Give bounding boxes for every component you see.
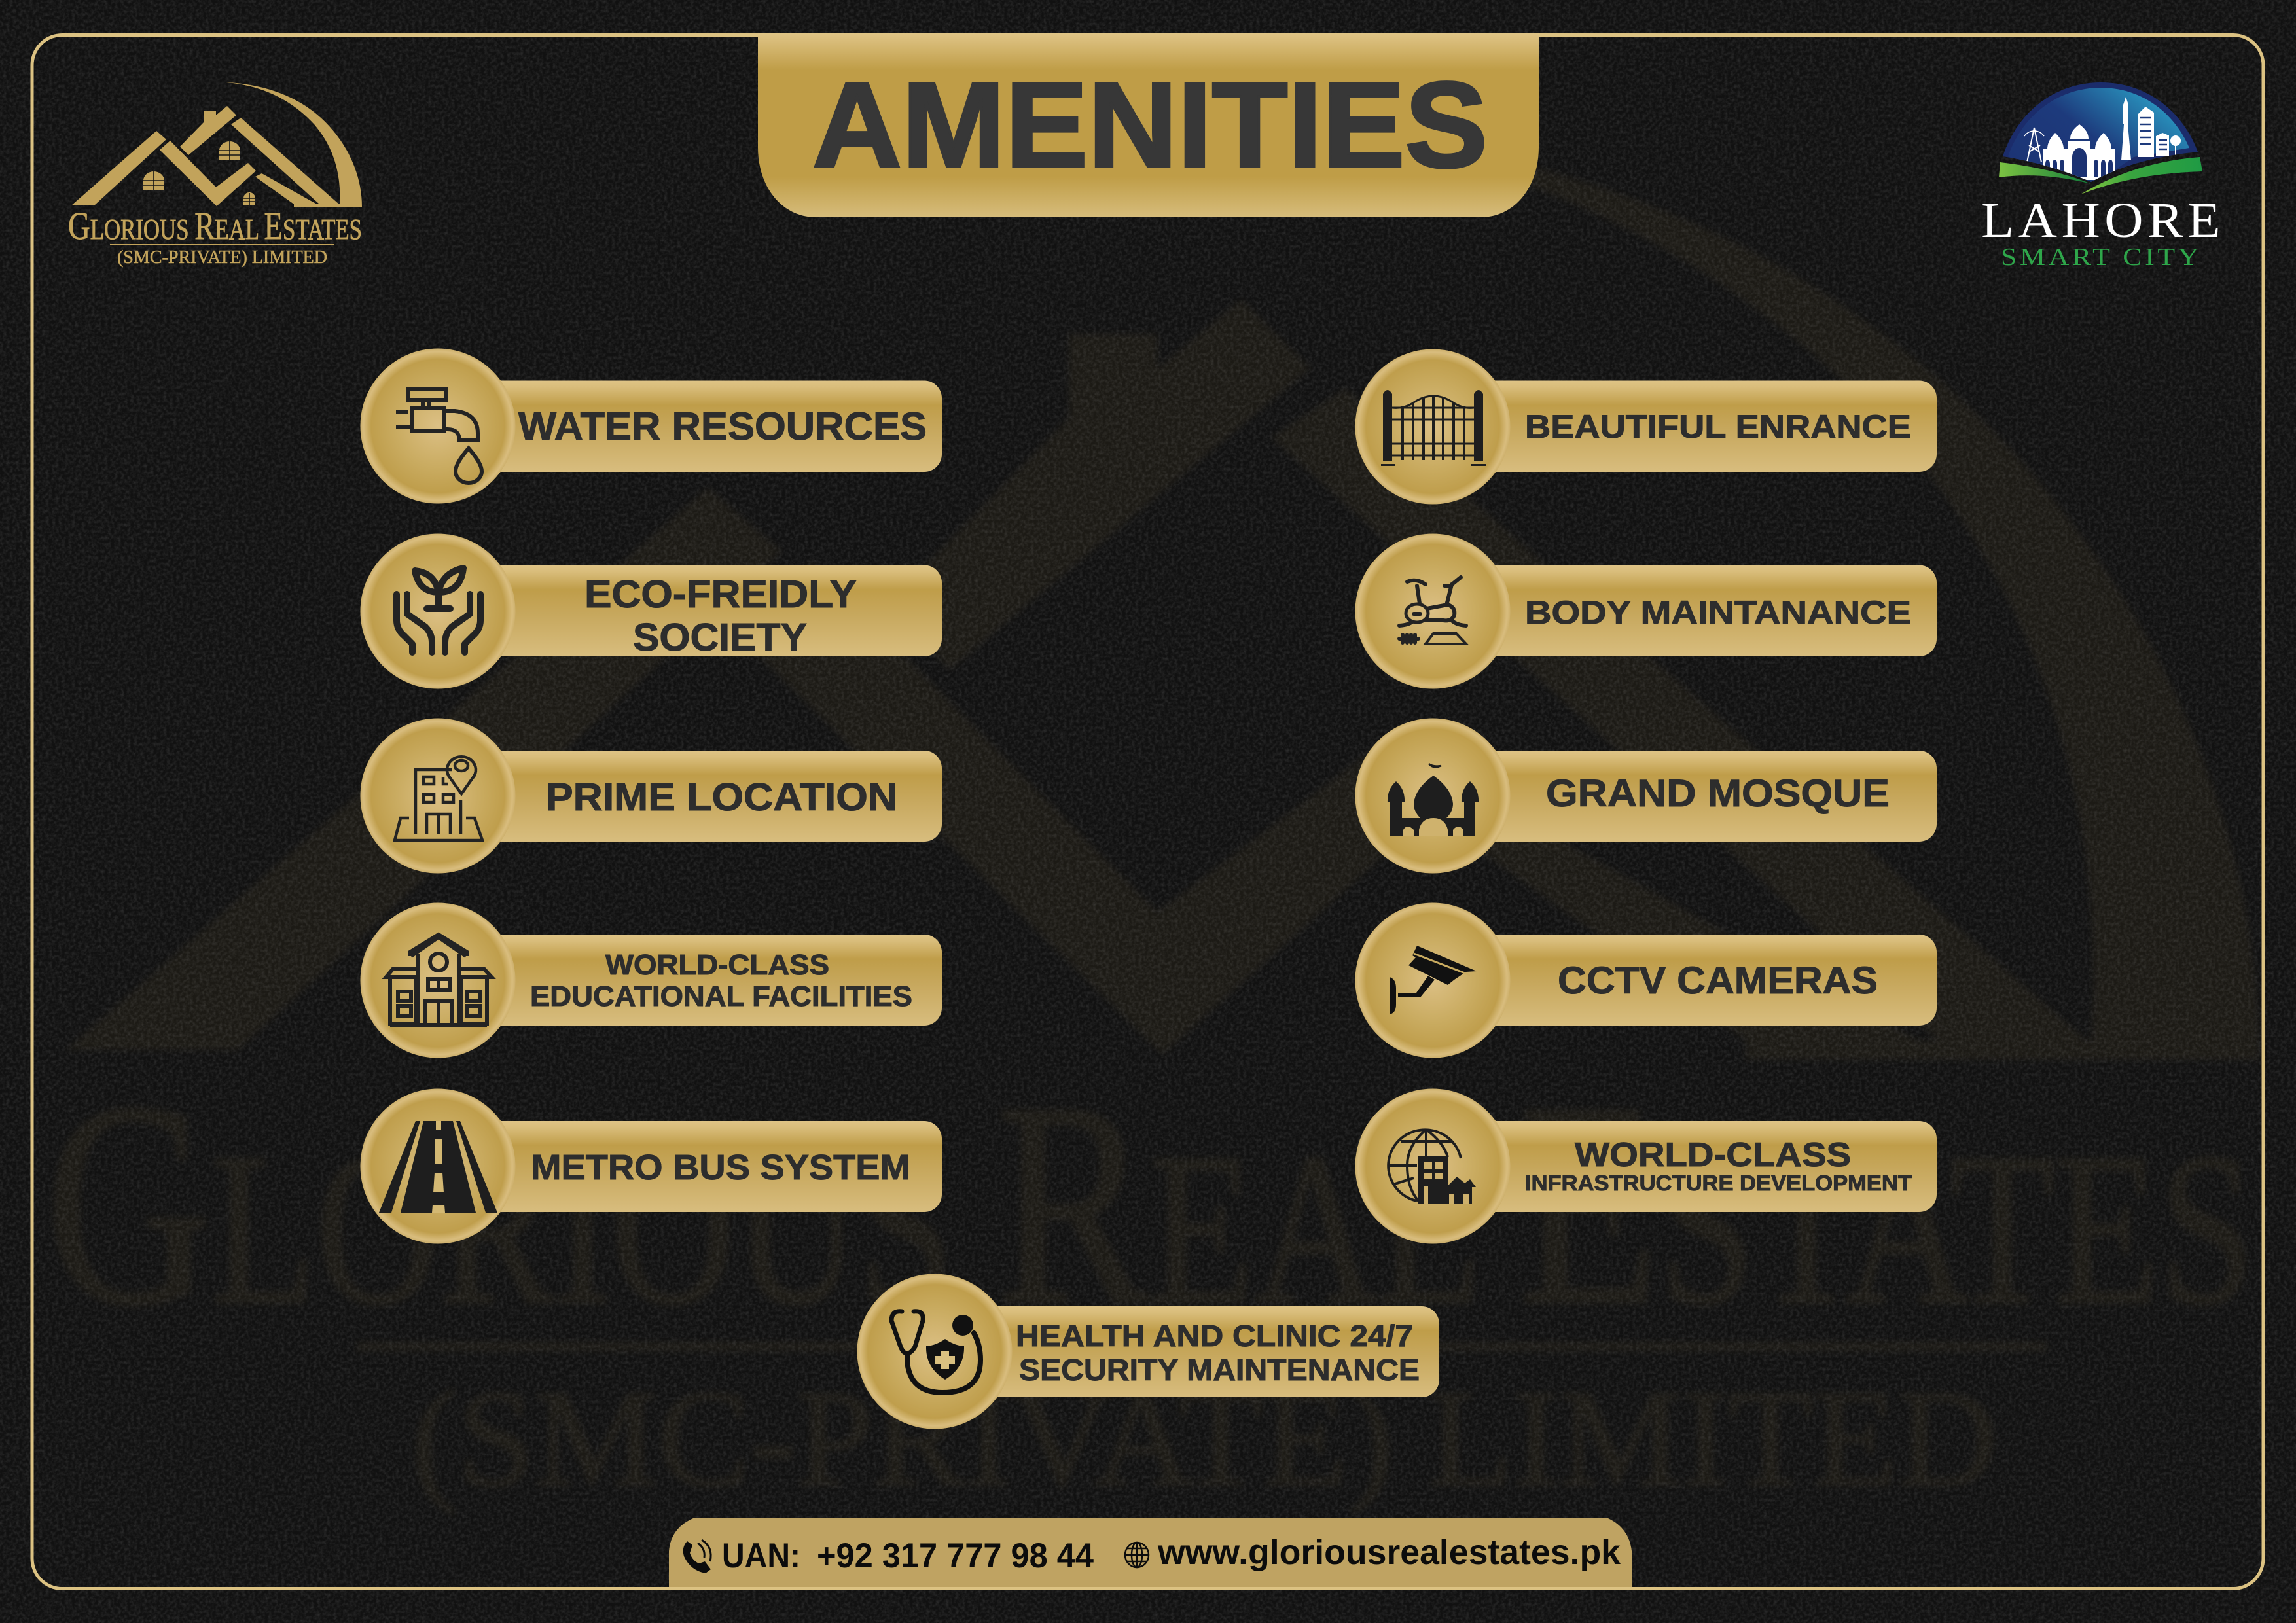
logo: Lahore Smart City: [1981, 79, 2225, 271]
label: [584, 573, 857, 659]
label: EDUCATIONAL FACILITIES: [530, 980, 912, 1012]
icon: road: [379, 1121, 497, 1213]
amenity: body maintenance: [1355, 534, 1937, 688]
amenity: educational facilities: [360, 903, 942, 1058]
amenity: health and clinic, security: [857, 1274, 1439, 1429]
amenity: grand mosque: [1355, 719, 1937, 873]
watermark: large faint company logo: (SMC-PRIVATE) LIMITED: [411, 1362, 1998, 1515]
logo small roof: [255, 173, 317, 204]
icon: mosque: [1388, 764, 1479, 836]
label: ECO-FREIDLY: [584, 573, 857, 616]
logo right roof: [231, 118, 339, 204]
label: [530, 949, 912, 1012]
logo rule: [110, 244, 334, 245]
LAHORE wordmark: LAHORE: [1981, 193, 2225, 248]
label: INFRASTRUCTURE DEVELOPMENT: [1525, 1171, 1912, 1195]
title tab: [758, 33, 1539, 217]
amenity: prime location: [360, 719, 942, 873]
icon: exercise bike: [1399, 577, 1466, 644]
label: WATER RESOURCES: [518, 404, 927, 448]
label: [1525, 1136, 1912, 1195]
website: www.gloriousrealestates.pk: [1157, 1533, 1621, 1572]
icon: globe: [1125, 1543, 1149, 1567]
title: AMENITIES: [812, 58, 1488, 193]
label: WORLD-CLASS: [605, 949, 829, 981]
amenity: eco-friendly society: [360, 534, 942, 688]
logo upper roof with chimney: [180, 106, 236, 155]
logo windows: [143, 141, 255, 205]
label: SOCIETY: [633, 616, 807, 659]
icon: building with map pin: [395, 757, 482, 840]
label: BODY MAINTANANCE: [1525, 594, 1911, 631]
icon: school building: [386, 935, 492, 1025]
logo: Glorious Real Estates: [68, 82, 362, 268]
amenity: water resources: [360, 348, 942, 504]
logo subtitle: (SMC-PRIVATE) LIMITED: [117, 247, 327, 268]
left green swoosh: [1999, 162, 2091, 184]
label: GRAND MOSQUE: [1546, 772, 1890, 815]
icon: hands holding plant: [397, 568, 480, 652]
amenity: CCTV cameras: [1355, 903, 1937, 1058]
SMART CITY wordmark: SMART CITY: [2001, 243, 2202, 271]
label: WORLD-CLASS: [1575, 1136, 1851, 1174]
label: PRIME LOCATION: [546, 776, 897, 819]
icon: security camera: [1390, 946, 1477, 1014]
icon: telephone: [683, 1540, 711, 1573]
phone number: +92 317 777 98 44: [817, 1537, 1094, 1575]
skyline dome: [2003, 82, 2198, 182]
label: HEALTH AND CLINIC 24/7: [1016, 1319, 1413, 1353]
logo crescent arc: [211, 82, 362, 207]
logo left roof: [71, 131, 166, 205]
amenity: metro bus system: [360, 1089, 942, 1243]
logo company name: GLORIOUS REAL ESTATES: [68, 204, 362, 247]
footer contact tab: [669, 1518, 1632, 1587]
icon: globe with buildings: [1388, 1130, 1476, 1204]
logo valley roof: [160, 141, 256, 206]
amenity: infrastructure development: [1355, 1089, 1937, 1243]
phone label: UAN:: [722, 1537, 800, 1575]
label: SECURITY MAINTENANCE: [1019, 1353, 1420, 1387]
label: METRO BUS SYSTEM: [531, 1148, 910, 1187]
icon: stethoscope with shield: [891, 1311, 980, 1393]
icon: gate: [1381, 390, 1486, 466]
label: [1016, 1319, 1420, 1387]
right green swoosh: [2081, 157, 2202, 194]
label: CCTV CAMERAS: [1558, 959, 1878, 1002]
label: BEAUTIFUL ENRANCE: [1525, 408, 1911, 445]
icon: water tap: [396, 389, 482, 483]
amenity: beautiful entrance: [1355, 349, 1937, 504]
